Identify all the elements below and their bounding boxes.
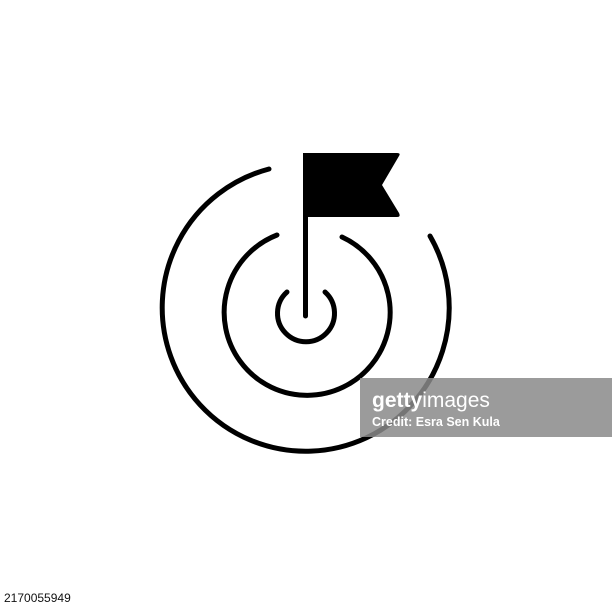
watermark credit: Credit: Esra Sen Kula: [372, 415, 501, 429]
inner ring: [278, 292, 334, 342]
image id: 2170055949: [4, 591, 71, 605]
flag pole: [303, 156, 308, 316]
watermark logo text: gettyimages: [372, 389, 490, 412]
flag: [303, 153, 400, 217]
outer ring: [162, 169, 449, 451]
middle ring: [224, 235, 390, 395]
icon: target with flag: [162, 156, 449, 451]
watermark box: [360, 378, 612, 437]
